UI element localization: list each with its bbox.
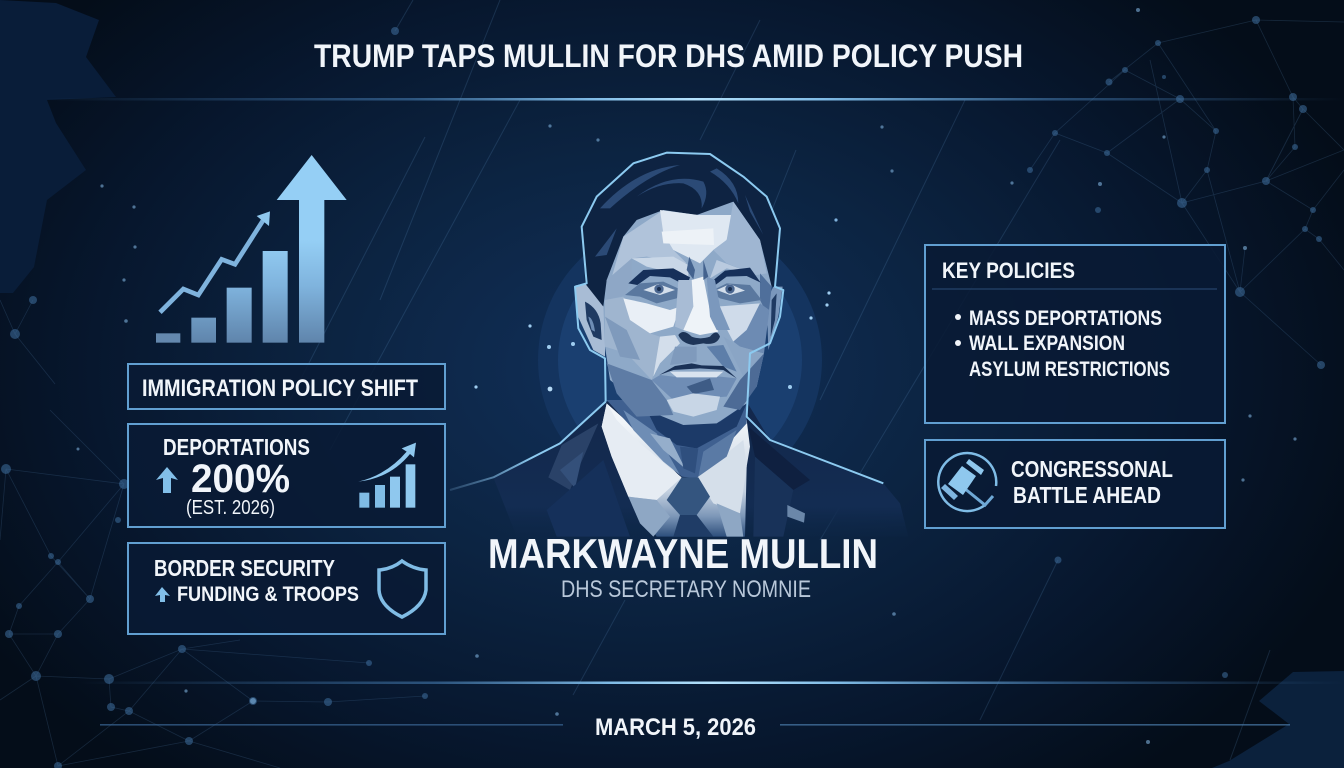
portrait: Markwayne Mullin illustration [450,153,908,537]
portrait: light-blue outline [450,153,883,490]
panel: key policies: ASYLUM RESTRICTIONS [969,358,1170,381]
panel: immigration policy shift: IMMIGRATION POLICY SHIFT [142,375,418,402]
portrait: lapels and shoulder shading [547,423,810,537]
subtitle: DHS SECRETARY NOMNIE [561,576,811,603]
panel: congressional battle ahead [925,440,1225,528]
icon: shield [379,561,426,617]
portrait: hair [582,153,780,307]
panel: congressional battle ahead: BATTLE AHEAD [1013,482,1161,508]
portrait: face [603,202,772,425]
panel: key policies: KEY POLICIES [942,258,1075,283]
icon: up arrow [156,467,178,493]
name: MARKWAYNE MULLIN [488,530,878,577]
icon: small bar chart [358,443,416,508]
panel: deportations: DEPORTATIONS [163,434,310,460]
icon: small up arrow [155,587,170,602]
portrait: shirt [602,403,750,537]
title: TRUMP TAPS MULLIN FOR DHS AMID POLICY PUSH [314,38,1023,74]
panel: border security [128,543,445,634]
panel: deportations: 200% [191,457,290,501]
date: MARCH 5, 2026 [595,714,756,741]
portrait: forehead facets [607,202,772,317]
portrait: neck [607,400,747,478]
bottom divider line [80,682,1344,684]
portrait: tie [667,477,713,537]
top divider line [45,98,1344,100]
panel: border security: FUNDING & TROOPS [177,583,359,606]
date rules [100,724,1290,726]
panel: border security: BORDER SECURITY [154,555,335,581]
panel: key policies: MASS DEPORTATIONS [969,307,1162,330]
portrait: cheek facets [605,297,769,387]
panel: deportations: (EST. 2026) [186,497,275,519]
panel: key policies: WALL EXPANSION [969,332,1125,355]
portrait glow [474,218,838,502]
portrait: suit [493,402,908,537]
icon: gavel [938,453,996,511]
panel: immigration policy shift [128,364,445,409]
panel: deportations [128,424,445,527]
portrait: nose [675,257,730,345]
panel: key policies [925,245,1225,423]
portrait: mouth and chin [607,353,764,417]
portrait: brows and sockets [625,268,762,303]
panel: congressional battle ahead: CONGRESSONAL [1011,456,1173,482]
portrait: eyes [643,284,745,295]
chart icon: rising bars and arrow [156,155,347,343]
portrait: ears [575,283,605,357]
